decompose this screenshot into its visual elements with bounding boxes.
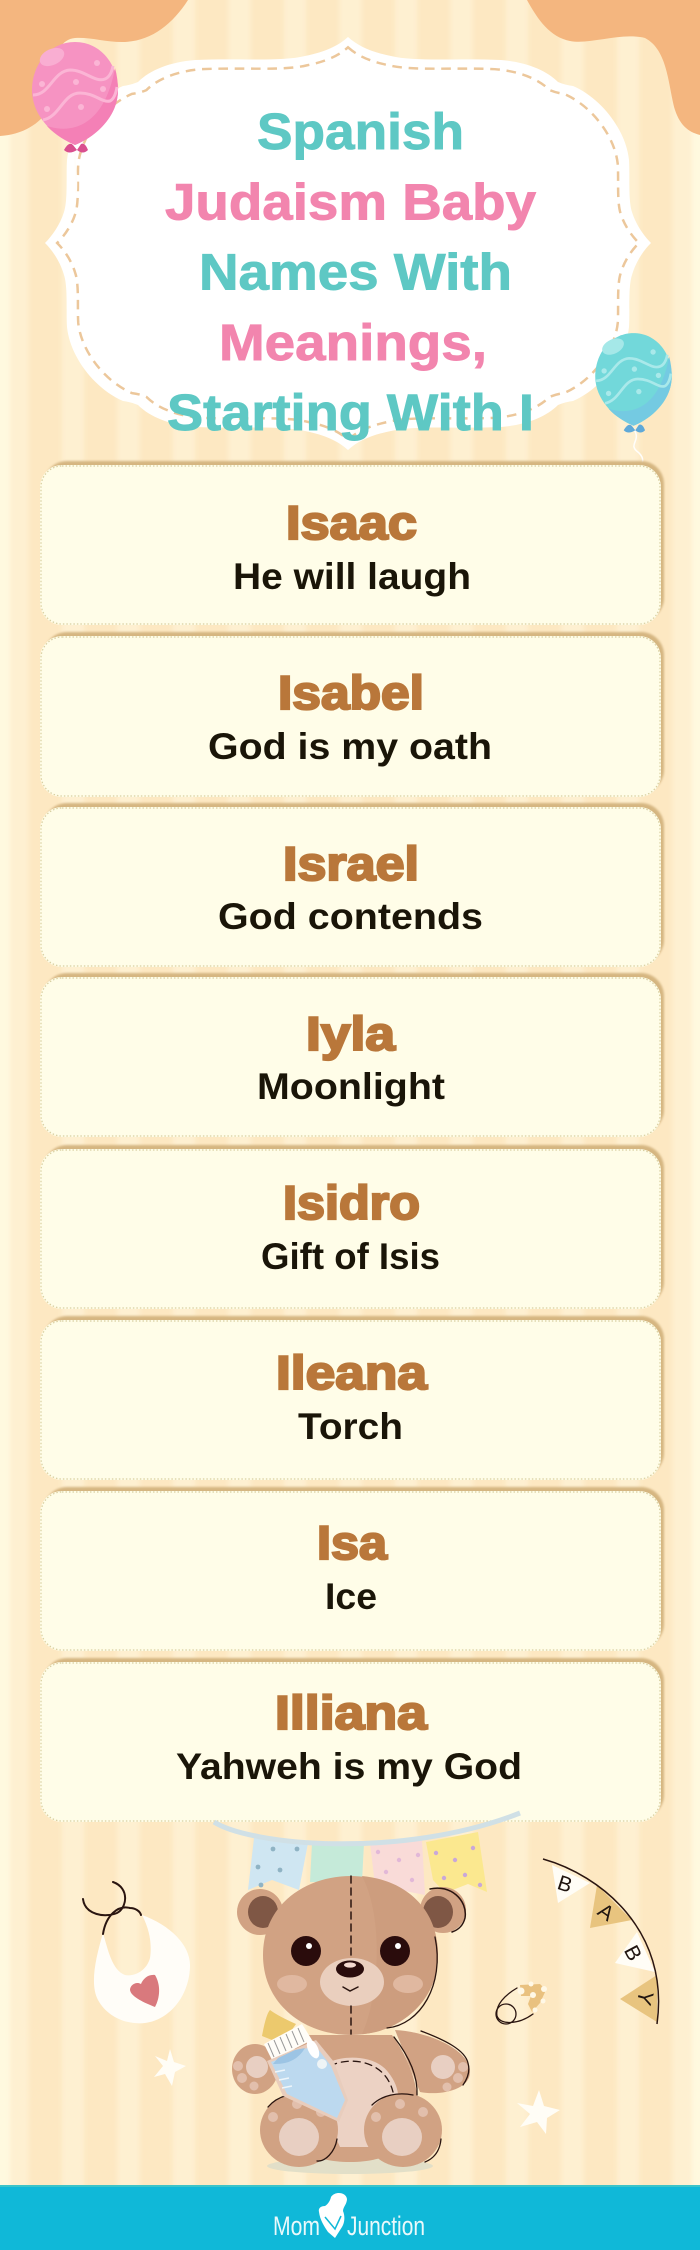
bear head xyxy=(263,1876,438,2035)
card: Isabel xyxy=(40,632,664,797)
curtain: top right xyxy=(527,0,700,135)
pennant: BABY: B xyxy=(619,1942,646,1965)
pennant: BABY: Y xyxy=(632,1988,657,2008)
card: Illiana: Yahweh is my God xyxy=(176,1746,522,1787)
card: Israel xyxy=(40,803,664,967)
logo: MomJunction: Junction xyxy=(347,2211,425,2241)
card: Ileana: Ileana xyxy=(276,1346,428,1399)
title: Names With xyxy=(199,244,512,300)
bear face xyxy=(277,1876,423,2034)
card: Isa xyxy=(40,1487,664,1651)
footer bar xyxy=(0,2185,700,2250)
icon: pink balloon xyxy=(32,42,118,193)
plaque: title background xyxy=(45,37,651,450)
teddy bear xyxy=(232,1876,470,2174)
title: Meanings, xyxy=(219,314,487,371)
icon: teal balloon xyxy=(595,333,672,473)
card: Isaac: Isaac xyxy=(286,496,417,549)
title: Spanish xyxy=(257,103,464,160)
icon: star right xyxy=(517,2090,560,2134)
logo: MomJunction xyxy=(273,2193,425,2241)
icon: star left xyxy=(154,2049,186,2086)
card: Illiana: Illiana xyxy=(275,1686,428,1739)
card: Ileana: Torch xyxy=(298,1406,403,1447)
pennant: BABY xyxy=(543,1859,659,2024)
card: Illiana xyxy=(40,1658,664,1822)
baby bottle xyxy=(262,2010,348,2122)
title: Starting With I xyxy=(167,384,534,441)
bear feet xyxy=(260,2093,442,2167)
bear ears xyxy=(237,1887,466,1935)
card: Isaac xyxy=(40,461,664,625)
curtain: top left xyxy=(0,0,188,136)
card: Isa: Ice xyxy=(325,1576,377,1617)
card: Isabel: God is my oath xyxy=(208,726,492,767)
title xyxy=(165,103,537,441)
icon: safety pin xyxy=(496,1982,547,2024)
card: Isidro xyxy=(40,1145,664,1309)
pennant: BABY: A xyxy=(593,1899,618,1926)
card: Israel: God contends xyxy=(218,896,483,937)
bear body xyxy=(282,2035,418,2162)
card: Ileana xyxy=(40,1316,664,1480)
title: Judaism Baby xyxy=(165,174,537,230)
card: Isaac: He will laugh xyxy=(233,556,471,597)
bunting: pastel flags xyxy=(214,1813,520,1895)
bear belly patch xyxy=(328,2058,398,2147)
card: Iyla: Iyla xyxy=(306,1007,396,1060)
card: Isabel: Isabel xyxy=(278,666,424,719)
card: Israel: Israel xyxy=(283,837,419,890)
card: Isidro: Gift of Isis xyxy=(261,1236,440,1277)
card: Iyla xyxy=(40,973,664,1137)
pennant: BABY: B xyxy=(555,1871,575,1898)
bear arms xyxy=(232,2030,470,2094)
icon: bib xyxy=(83,1882,190,2023)
card: Isa: Isa xyxy=(317,1516,388,1569)
card: Isidro: Isidro xyxy=(283,1176,420,1229)
card: Iyla: Moonlight xyxy=(257,1066,445,1107)
bear shadow xyxy=(267,2158,433,2174)
logo: MomJunction: Mom xyxy=(273,2211,320,2241)
